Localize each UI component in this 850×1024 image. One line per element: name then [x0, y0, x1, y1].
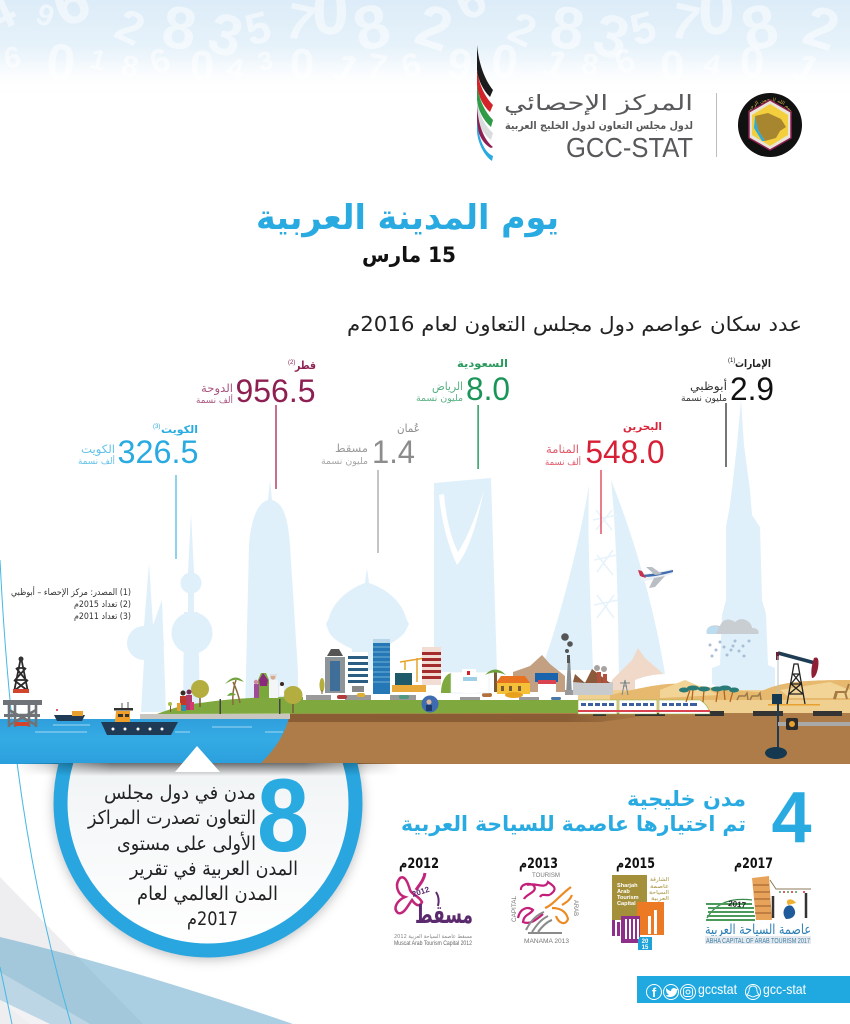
illustration: cargo ship — [101, 702, 178, 735]
icon: instagram — [680, 984, 696, 1000]
background: numeral pattern header: 1 — [86, 43, 110, 77]
population: Oman: مليون نسمة — [321, 457, 368, 467]
logo: GCC seal: بسم الله الرحمن الرحيم — [748, 98, 792, 112]
heading: 4 Gulf cities — [401, 778, 812, 858]
illustration: trees, palms and lamps — [168, 677, 324, 714]
icon: snapchat — [746, 984, 760, 1000]
skyline: Bahrain World Trade Center — [541, 480, 666, 680]
logo: Muscat 2012: مسقط عاصمة السياحة العربية 2012 — [394, 934, 472, 940]
background: numeral pattern header: 0 — [190, 42, 214, 91]
logo: Manama 2013: CAPITAL — [511, 896, 518, 922]
background: numeral pattern header: 1 — [326, 45, 367, 94]
logo: Sharjah 2015: 20 — [642, 939, 649, 945]
logo: Sharjah 2015: Arab — [617, 889, 630, 895]
background: numeral pattern header: 0 — [44, 33, 78, 93]
logo: GCC seal — [738, 93, 802, 157]
heading: 4 Gulf cities: 4 — [772, 778, 812, 858]
circle text: المدن العربية في تقرير — [129, 858, 298, 880]
logo: Sharjah 2015: السياحة — [649, 890, 669, 896]
date: 15 مارس — [362, 243, 456, 267]
circle text: التعاون تصدرت المراكز — [87, 807, 256, 829]
population: Bahrain — [545, 421, 664, 534]
population: UAE — [681, 358, 774, 467]
background: numeral pattern header: 0 — [489, 35, 520, 90]
year labels: 2017م — [734, 856, 773, 872]
population: Saudi Arabia: السعودية — [457, 358, 508, 370]
footnotes: (2) تعداد 2015م — [74, 600, 131, 610]
logo divider — [716, 93, 717, 157]
population: Qatar: قطر — [294, 359, 316, 372]
background: numeral pattern header: 1 — [786, 45, 827, 94]
illustration: cloud and rain — [707, 619, 759, 658]
logo: Sharjah 2015: Sharjah — [617, 883, 638, 889]
population: UAE: مليون نسمة — [681, 394, 727, 404]
logo: Sharjah 2015 — [612, 875, 669, 951]
background: numeral pattern header: 1 — [536, 40, 575, 90]
population: Oman — [321, 422, 420, 553]
population: Kuwait: 326.5 — [118, 434, 198, 470]
population: Qatar: (2) — [288, 360, 295, 366]
background: numeral pattern header: 3 — [587, 0, 636, 73]
year labels: 2013م — [519, 856, 558, 872]
illustration: airplane — [638, 567, 673, 588]
pointer triangle — [175, 746, 220, 772]
logo: Sharjah 2015: عاصمة — [650, 884, 669, 890]
background: numeral pattern header: 3 — [202, 0, 250, 71]
background: numeral pattern header: 6 — [145, 40, 176, 83]
background: numeral pattern header: 4 — [701, 48, 724, 83]
illustration: oil rig — [3, 656, 42, 727]
logo: Manama 2013 — [511, 872, 579, 945]
logo: Sharjah 2015: 15 — [642, 945, 649, 951]
skyline: Kingdom Centre, Riyadh — [434, 478, 497, 672]
population: Oman: مسقط — [335, 441, 368, 455]
title: يوم المدينة العربية — [256, 198, 559, 238]
background: numeral pattern header: 0 — [740, 38, 764, 87]
subtitle: عدد سكان عواصم دول مجلس التعاون لعام 2016م — [347, 312, 802, 336]
logo: Sharjah 2015: الشارقة — [650, 877, 669, 883]
skyline: Doha tower — [245, 480, 298, 712]
footnotes — [11, 586, 131, 622]
logo: Abha 2017 — [705, 876, 811, 945]
background: numeral pattern header: 8 — [579, 47, 601, 83]
background: numeral pattern header: 3 — [255, 45, 275, 77]
illustration: palms and animals in desert — [679, 684, 849, 702]
circle text: الأولى على مستوى — [117, 832, 256, 855]
illustration: people — [177, 673, 284, 711]
circle text: المدن العالمي لعام — [137, 883, 278, 905]
population: Bahrain: البحرين — [623, 421, 662, 433]
background: numeral pattern header: 6 — [610, 40, 641, 83]
population: Kuwait: الكويت — [81, 442, 115, 457]
logo: GCC-STAT ribbon — [477, 45, 493, 161]
logo: Muscat 2012 — [394, 873, 473, 947]
year labels: 2015م — [616, 856, 655, 872]
logo: Manama 2013: ARAB — [572, 900, 579, 916]
illustration: small boat — [54, 709, 85, 721]
population: UAE: 2.9 — [730, 371, 774, 407]
circle text: مدن في دول مجلس — [104, 782, 256, 804]
background: numeral pattern header: 0 — [290, 40, 314, 89]
population: Qatar: الدوحة — [201, 381, 233, 396]
illustration: city buildings — [325, 633, 630, 698]
skyline: Muscat dome — [326, 568, 409, 670]
logo: Manama 2013: TOURISM — [532, 872, 560, 879]
background: numeral pattern header: 5 — [240, 2, 276, 56]
skyline: Kuwait Towers — [127, 513, 212, 712]
logo: GCC-STAT wordmark — [504, 91, 693, 163]
footnotes: (1) المصدر: مركز الإحصاء – أبوظبي — [11, 586, 131, 598]
population: UAE: (1) — [728, 358, 735, 364]
circle text: 2017م — [187, 908, 238, 930]
logo: Muscat 2012: 2012 — [411, 885, 431, 899]
decorative bottom-left shapes — [0, 560, 293, 1024]
logo: Abha 2017: ABHA CAPITAL OF ARAB TOURISM 2017 — [706, 936, 810, 945]
population: Saudi Arabia — [416, 358, 510, 469]
background: numeral pattern header: 4 — [224, 52, 247, 87]
heading: 4 Gulf cities: تم اختيارها عاصمة للسياحة العربية — [401, 812, 746, 836]
skyline: Burj Khalifa, Abu Dhabi — [712, 400, 775, 695]
background: numeral pattern header: 9 — [443, 39, 476, 91]
heading: 4 Gulf cities: مدن خليجية — [627, 787, 746, 811]
logo: Muscat 2012: Muscat Arab Tourism Capital 2012 — [394, 941, 473, 947]
handle: gcc-stat — [763, 981, 806, 997]
logo: GCC-STAT wordmark: لدول مجلس التعاون لدول الخليج العربية — [505, 120, 693, 132]
population: Saudi Arabia: مليون نسمة — [416, 394, 463, 404]
big number 8: 8 — [257, 758, 309, 874]
handle: gccstat — [698, 981, 737, 997]
background: numeral pattern header: 5 — [625, 2, 661, 56]
icon: twitter — [664, 984, 678, 1000]
panel: 8 cities circle — [22, 746, 394, 966]
population: Qatar: ألف نسمة — [196, 394, 233, 406]
logo: GCC-STAT wordmark: GCC-STAT — [566, 132, 693, 163]
band shadow — [22, 763, 394, 775]
population: UAE: الإمارات — [735, 358, 771, 370]
illustration: train — [578, 700, 842, 716]
population: Kuwait: (3) — [153, 424, 160, 430]
population: Kuwait: ألف نسمة — [78, 455, 115, 467]
population: UAE: أبوظبي — [690, 378, 727, 394]
background: numeral pattern header — [0, 0, 850, 95]
icon: facebook: f — [652, 985, 657, 1000]
population: Bahrain: المنامة — [546, 442, 579, 456]
background: numeral pattern header: 6 — [1, 40, 24, 76]
logo: Manama 2013: MANAMA 2013 — [524, 938, 569, 945]
logo: Sharjah 2015: Tourism — [617, 895, 639, 901]
year labels — [399, 856, 773, 872]
illustration: courier badge — [422, 696, 438, 712]
illustration: ground, water and shore — [0, 697, 850, 764]
year labels: 2012م — [399, 856, 439, 872]
illustration: road — [303, 693, 578, 700]
background: numeral pattern header: 7 — [364, 45, 390, 88]
background: numeral pattern header: 6 — [397, 45, 425, 87]
logo: Abha 2017: عاصمة السياحة العربية — [705, 922, 811, 938]
population: Qatar — [196, 359, 316, 489]
population: Saudi Arabia: الرياض — [432, 379, 463, 394]
background: numeral pattern header: 0 — [660, 42, 684, 91]
logo: Abha 2017: 2017 — [728, 899, 747, 910]
logo: Muscat 2012: مسقط — [415, 900, 473, 929]
icon: facebook — [646, 984, 662, 1000]
population: Bahrain: 548.0 — [586, 434, 664, 470]
population: Oman: عُمان — [397, 422, 420, 435]
population: Oman: 1.4 — [372, 434, 415, 470]
footer social bar — [637, 976, 850, 1003]
logo: GCC-STAT wordmark: المركز الإحصائي — [504, 91, 693, 115]
population: Kuwait — [78, 424, 198, 559]
illustration: oil pump jack — [765, 652, 850, 759]
background: numeral pattern header: 2 — [501, 3, 544, 57]
population: Qatar: 956.5 — [236, 373, 316, 409]
footnotes: (3) تعداد 2011م — [74, 612, 131, 622]
logo: Sharjah 2015: Capital — [617, 901, 636, 907]
population: Kuwait: الكويت — [161, 424, 198, 436]
circle text — [87, 782, 298, 930]
population: Bahrain: ألف نسمة — [545, 456, 581, 468]
logo: Sharjah 2015: العربية — [651, 896, 669, 902]
illustration: mountains, dunes and desert — [513, 648, 850, 714]
population: Saudi Arabia: 8.0 — [466, 371, 510, 407]
background: numeral pattern header: 8 — [119, 49, 141, 85]
